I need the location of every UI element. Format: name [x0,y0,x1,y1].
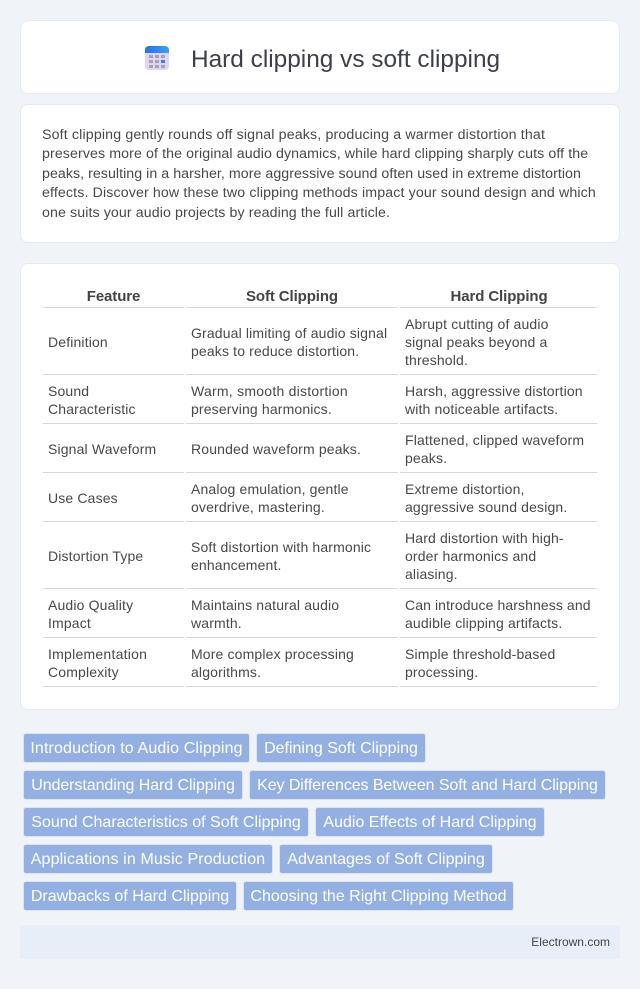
topic tags: Sound Characteristics of Soft Clipping [31,814,301,831]
comparison table: More complex processing [191,646,354,662]
title: Hard clipping vs soft clipping [191,46,500,73]
comparison table: enhancement. [191,557,282,573]
comparison table: peaks to reduce distortion. [191,343,359,359]
comparison table: Gradual limiting of audio signal [191,325,387,341]
comparison table: Flattened, clipped waveform [405,432,584,448]
comparison table: preserving harmonics. [191,401,332,417]
comparison table [43,288,597,687]
panel: title card [20,20,620,94]
comparison table: Simple threshold-based [405,646,555,662]
comparison table: Characteristic [48,401,136,417]
topic tags [23,733,606,911]
comparison table: peaks. [405,450,447,466]
intro text: preserves more of the original audio dynamics, while hard clipping sharply cuts off the [42,146,588,162]
comparison table: Can introduce harshness and [405,597,591,613]
comparison table: Extreme distortion, [405,481,525,497]
topic tags: Understanding Hard Clipping [31,777,235,794]
comparison table: aggressive sound design. [405,499,567,515]
comparison table: Definition [48,334,108,350]
footer: Electrown.com [531,935,610,949]
comparison table: Analog emulation, gentle [191,481,349,497]
topic tags: Advantages of Soft Clipping [287,851,485,868]
topic tags: Drawbacks of Hard Clipping [31,888,229,905]
panel: introduction [20,104,620,243]
intro text: one suits your audio projects by reading the full article. [42,205,390,221]
comparison table: Maintains natural audio [191,597,339,613]
intro text: Soft clipping gently rounds off signal peaks, producing a warmer distortion that [42,127,545,143]
comparison table: Signal Waveform [48,441,156,457]
intro text: effects. Discover how these two clipping methods impact your sound design and which [42,185,596,201]
comparison table: threshold. [405,352,468,368]
topic tags: Audio Effects of Hard Clipping [323,814,537,831]
intro text: peaks, resulting in a harsher, more aggressive sound often used in extreme distortion [42,166,581,182]
footer [20,925,620,959]
topic tags: Defining Soft Clipping [264,740,418,757]
comparison table: algorithms. [191,664,261,680]
comparison table: Harsh, aggressive distortion [405,383,583,399]
comparison table: aliasing. [405,566,458,582]
comparison table: Sound [48,383,89,399]
comparison table: with noticeable artifacts. [405,401,558,417]
topic tags: Introduction to Audio Clipping [30,740,243,757]
comparison table: Soft distortion with harmonic [191,539,371,555]
table header [87,288,548,305]
topic tags: Applications in Music Production [31,851,265,868]
comparison table: Complexity [48,664,119,680]
topic tags: Choosing the Right Clipping Method [250,888,507,905]
comparison table: signal peaks beyond a [405,334,547,350]
comparison table: processing. [405,664,478,680]
comparison table: overdrive, mastering. [191,499,325,515]
comparison table: warmth. [191,615,242,631]
comparison table: Implementation [48,646,147,662]
comparison table: Hard distortion with high- [405,530,564,546]
comparison table: Impact [48,615,91,631]
intro text [42,127,596,221]
comparison table: Audio Quality [48,597,133,613]
table header: Soft Clipping [246,288,338,305]
table header: Feature [87,288,140,305]
comparison table: audible clipping artifacts. [405,615,562,631]
comparison table: Rounded waveform peaks. [191,441,361,457]
comparison table: Abrupt cutting of audio [405,316,549,332]
comparison table: Distortion Type [48,548,143,564]
panel: comparison table [20,263,620,710]
comparison table: order harmonics and [405,548,536,564]
table header: Hard Clipping [450,288,548,305]
comparison table: Use Cases [48,490,118,506]
comparison table: Warm, smooth distortion [191,383,348,399]
topic tags: Key Differences Between Soft and Hard Clipping [257,777,598,794]
icon: calendar [145,46,169,70]
